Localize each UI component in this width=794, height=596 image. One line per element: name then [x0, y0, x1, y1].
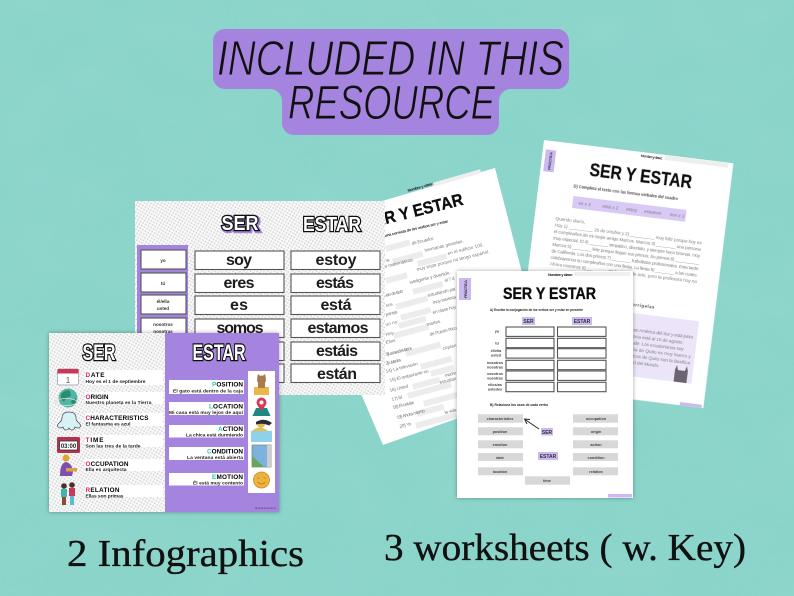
icon: digital clock	[57, 437, 80, 453]
worksheet: middle tilted page: 19) Ahora mismo	[396, 408, 426, 420]
worksheet: middle tilted page: 17) Sí	[391, 394, 404, 402]
use chips: origin	[591, 430, 602, 434]
ESTAR conjugations: estáis	[316, 343, 358, 360]
worksheet: middle tilted page: muy traviesa	[432, 294, 457, 305]
worksheet: middle tilted page: Ellos	[385, 338, 397, 345]
SER conjugations: somos	[216, 320, 264, 337]
text: location: LOCATION	[209, 404, 243, 410]
text: position: El gato está dentro de la caja	[173, 388, 243, 394]
worksheet: middle tilted page: el 7 d	[444, 276, 455, 283]
worksheet: middle tilted page: muy triste porque no tengo español.	[416, 249, 490, 272]
worksheet: right tilted page: ncia está al 10 de agosto	[632, 334, 683, 345]
use chips: condition	[587, 456, 605, 460]
conjugation table: él/ella	[491, 349, 502, 353]
worksheet: right tilted page: SER Y ESTAR	[588, 160, 693, 192]
text: origin: ORIGIN	[86, 394, 109, 401]
worksheet: right tilted page: el cumpleaños de mi mejor amigo Marcos. Marcos 3) ________ una persona	[554, 229, 702, 252]
worksheet: right tilted page: de California. Los dos primos 7) ________ futbolistas profesionales. Esta tarde	[551, 248, 699, 271]
worksheet: right tilted page: ma de Quito es muy bueno y	[631, 347, 692, 359]
conjugation table	[487, 327, 606, 392]
text: emotion: Él está muy contento	[193, 478, 243, 486]
ESTAR conjugations: está	[320, 297, 352, 314]
worksheet: middle tilted page: martes.	[426, 318, 442, 327]
worksheet: middle tilted page: Nombre y clase:	[407, 181, 434, 193]
text: occupation	[86, 461, 129, 473]
SER conjugations: eres	[224, 275, 255, 292]
text: emotion	[193, 474, 243, 486]
text: time: TIME	[86, 437, 104, 444]
worksheet: middle tilted page: 18) El celular	[392, 400, 415, 410]
title banner: INCLUDED IN THIS	[217, 32, 564, 86]
worksheet: middle tilted page: inteligente y divertido.	[409, 270, 451, 285]
worksheet: middle tilted page	[290, 168, 551, 445]
use chips: occupation	[586, 417, 607, 421]
worksheet: right tilted page: muy especial. El 4) ________ simpático, divertido, y siempre hace bromas. Hoy	[553, 235, 701, 258]
pronoun column: él/ella	[157, 299, 170, 304]
icon: open window	[252, 445, 271, 467]
text: location: Mi casa está muy lejos de aquí	[169, 410, 244, 416]
text: date	[86, 372, 146, 385]
text: location	[169, 404, 244, 416]
text: emotion: EMOTION	[212, 474, 243, 481]
conjugation table: nosotras	[487, 366, 503, 370]
use chips: date	[496, 456, 504, 460]
worksheet: right tilted page: Nombre y clase:	[641, 153, 663, 161]
column labels: SER	[523, 319, 534, 325]
text: relation: Ellas son primas	[86, 494, 124, 500]
worksheet: right tilted page: estoy	[626, 207, 638, 213]
caption: infographics count: 2 Infographics	[67, 533, 304, 575]
worksheet: right tilted page: Marcos 5) ________ feliz porque llegan sus primos. Su primos 6) __________	[552, 242, 700, 265]
worksheet: right tilted page: ude. Los ecuatorianos soy	[632, 340, 685, 352]
worksheet title: SER Y ESTAR	[503, 285, 596, 303]
pronoun column	[137, 245, 188, 395]
SER and ESTAR labels: SER	[542, 430, 553, 436]
worksheet: right tilted page: está x 2	[602, 204, 619, 211]
instruction A: A) Escribe la conjugación de los verbos ser y estar en presente	[490, 307, 584, 312]
heading: SER front: SER	[222, 213, 259, 235]
instruction B: B) Relaciona los usos de cada verbo	[490, 402, 548, 407]
ESTAR conjugations: estoy	[316, 252, 357, 269]
SER and ESTAR labels: ESTAR	[540, 454, 557, 460]
panel: estar	[165, 333, 279, 512]
heading: ESTAR: ESTAR	[192, 340, 246, 365]
use chips: relation	[589, 470, 604, 474]
worksheet: right tilted page	[514, 140, 733, 408]
icon: cat in box	[254, 374, 269, 395]
name line	[548, 272, 630, 277]
worksheet: right tilted page: tad del Mundo.	[629, 360, 660, 368]
icon: ghost	[58, 412, 80, 430]
text: characteristics: CHARACTERISTICS	[86, 415, 149, 422]
pronoun column: yo	[160, 258, 166, 263]
worksheet: middle tilted page: van de lado	[384, 288, 404, 298]
text: action: ACTION	[218, 426, 243, 433]
conjugation table: ellos/as	[488, 383, 502, 387]
use chips: characteristics	[487, 417, 513, 421]
icon: map pin	[252, 398, 270, 416]
pronoun column: tú	[161, 281, 165, 286]
worksheet: middle tilted page: 16) Usted	[389, 383, 409, 393]
footer tag	[608, 494, 632, 498]
icon: architect	[60, 454, 77, 476]
worksheet: middle tilted page: sos	[385, 301, 394, 308]
worksheet: middle tilted page: 3) Ustedes	[385, 357, 402, 366]
worksheet: middle tilted page: 20) Yo	[399, 421, 412, 429]
SER and ESTAR labels	[538, 428, 558, 460]
text: date: Hoy es el 1 de septiembre	[86, 379, 146, 385]
infographic: conjugation chart	[135, 201, 385, 395]
text: time	[86, 437, 141, 450]
worksheet: right tilted page: Querido diario,	[555, 216, 586, 225]
worksheet: middle tilted page: Hoy	[385, 330, 395, 337]
text: time: Son las tres de la tarde	[86, 444, 141, 450]
icon: globe	[55, 388, 78, 408]
panel: ser	[49, 333, 165, 512]
worksheet: middle tilted page: una correcta de los verbos ser y estar	[384, 218, 449, 238]
worksheet: middle tilted page: pareja	[385, 309, 398, 317]
name line: Nombre y clase:	[548, 272, 573, 277]
icon: happy face	[254, 472, 270, 488]
use chips: emotion	[493, 443, 508, 447]
pronoun column: usted	[157, 306, 169, 311]
text: occupation: OCCUPATION	[86, 461, 129, 468]
text: relation	[86, 487, 124, 500]
ESTAR conjugations: están	[317, 366, 357, 383]
worksheet: middle tilted page: de Puerto Rico	[429, 325, 458, 337]
worksheet: right tilted page: D) Completa el texto con las formas verbales del cuadro	[573, 183, 678, 201]
worksheet: middle tilted page: de Ecuador.	[411, 236, 435, 246]
icon panel	[248, 371, 275, 493]
worksheet: right tilted page: son x 2	[670, 212, 685, 219]
worksheet: middle tilted page: 15) El restaurante no	[389, 368, 429, 383]
icon: digital clock: 03:00	[61, 444, 77, 450]
ESTAR conjugations: estás	[316, 275, 354, 292]
worksheet: middle tilted page: SER Y ESTAR	[362, 190, 465, 233]
text: position: POSITION	[212, 382, 243, 388]
icon: two people	[61, 482, 75, 505]
footer credit: @laurasilvaart	[255, 506, 276, 510]
worksheet: middle tilted page: 14) La televisión	[385, 361, 419, 374]
icon: calendar	[58, 369, 78, 385]
conjugation table: ustedes	[488, 388, 502, 392]
SER conjugations: soy	[226, 252, 252, 269]
icon: calendar: 1	[66, 376, 71, 385]
title banner: RESOURCE	[288, 77, 496, 130]
title banner	[213, 29, 569, 135]
worksheet: front page	[457, 271, 633, 498]
practice tab	[459, 278, 471, 300]
arrow	[524, 419, 539, 429]
text: condition: CONDITION	[207, 448, 243, 456]
column labels: ESTAR	[574, 319, 591, 325]
use chips: location	[493, 470, 508, 474]
text: occupation: Ella es arquitecta	[86, 467, 127, 473]
heading: SER: SER	[222, 214, 260, 236]
worksheet: middle tilted page: mucho	[444, 370, 457, 378]
worksheet: middle tilted page: estudiando par	[427, 286, 457, 298]
worksheet: right tilted page: estamos	[644, 209, 662, 216]
text: condition: La ventana está abierta	[187, 455, 243, 461]
worksheet: right tilted page: en América del Sur y está junto	[633, 327, 694, 340]
practice tab: PRÁCTICA	[463, 280, 468, 298]
text: origin: Nuestro planeta es la Tierra	[86, 400, 152, 406]
ESTAR conjugations: estamos	[308, 320, 369, 337]
worksheet: middle tilted page: copian	[442, 343, 457, 351]
use chips: action	[590, 443, 602, 447]
worksheet: middle tilted page: un no	[385, 319, 398, 327]
worksheet: middle tilted page: 5) La casa de Marcos	[385, 345, 413, 357]
worksheet: middle tilted page: la vida	[444, 407, 457, 415]
text: characteristics	[86, 415, 149, 428]
text: relation: RELATION	[86, 487, 120, 494]
worksheet: middle tilted page: en clase hoy	[432, 304, 457, 315]
worksheet: middle tilted page: en el edificio 100.	[447, 242, 484, 256]
conjugation table: nosotros	[487, 361, 503, 365]
text: characteristics: El fantasma es azul	[86, 422, 131, 428]
worksheet: right tilted page: es x 4	[578, 201, 591, 207]
column labels	[522, 317, 592, 325]
worksheet: right tilted page: y corrígelas	[624, 301, 655, 310]
worksheet: right tilted page: PRÁCTICA	[546, 152, 554, 170]
conjugation table: yo	[495, 330, 500, 334]
worksheet: right tilted page: nicos de Quito son la Basílica	[630, 353, 691, 365]
text: condition	[187, 448, 243, 461]
text: origin	[86, 394, 152, 406]
conjugation table: usted	[491, 354, 502, 358]
icon: sleeping girl	[251, 420, 272, 442]
text: position	[173, 382, 243, 394]
worksheet: middle tilted page: e matemáticas	[384, 257, 414, 269]
SER conjugations: es	[230, 297, 248, 314]
conjugation table: vosotras	[487, 376, 503, 380]
text: action	[186, 426, 243, 438]
conjugation table: tú	[495, 342, 499, 346]
infographic: uses of ser and estar	[49, 333, 279, 512]
text: date: DATE	[86, 372, 105, 379]
pronoun column: nosotras	[153, 329, 173, 334]
SER conjugations	[195, 251, 284, 382]
use chips	[478, 414, 618, 485]
worksheet: middle tilted page: hermanas gemelas.	[424, 238, 464, 253]
use chips: time	[543, 479, 551, 483]
pronoun column: nosotros	[153, 322, 173, 327]
worksheet: right tilted page: Hoy 1) __________ 25 de octubre y 2) __________ muy feliz porque hoy es	[554, 222, 703, 246]
worksheet: middle tilted page: la	[385, 257, 390, 263]
caption: worksheets count: 3 worksheets ( w. Key)	[384, 527, 746, 569]
text: action: La chica está durmiendo	[186, 432, 243, 438]
use chips: position	[493, 430, 508, 434]
worksheet: right tilted page: celebraremos su cumpleaños con una fiesta. La fiesta 8) ________ a las cuatro.	[550, 255, 698, 278]
heading: SER: SER	[82, 340, 116, 365]
worksheet: middle tilted page: estudian	[439, 376, 457, 385]
conjugation table: vosotros	[487, 372, 503, 376]
worksheet: right tilted page: Ahora nosotros 9) ________ en la clase de arte, pero la profesora hoy no	[550, 261, 698, 284]
heading: ESTAR: ESTAR	[303, 214, 361, 236]
ESTAR conjugations	[291, 251, 380, 383]
